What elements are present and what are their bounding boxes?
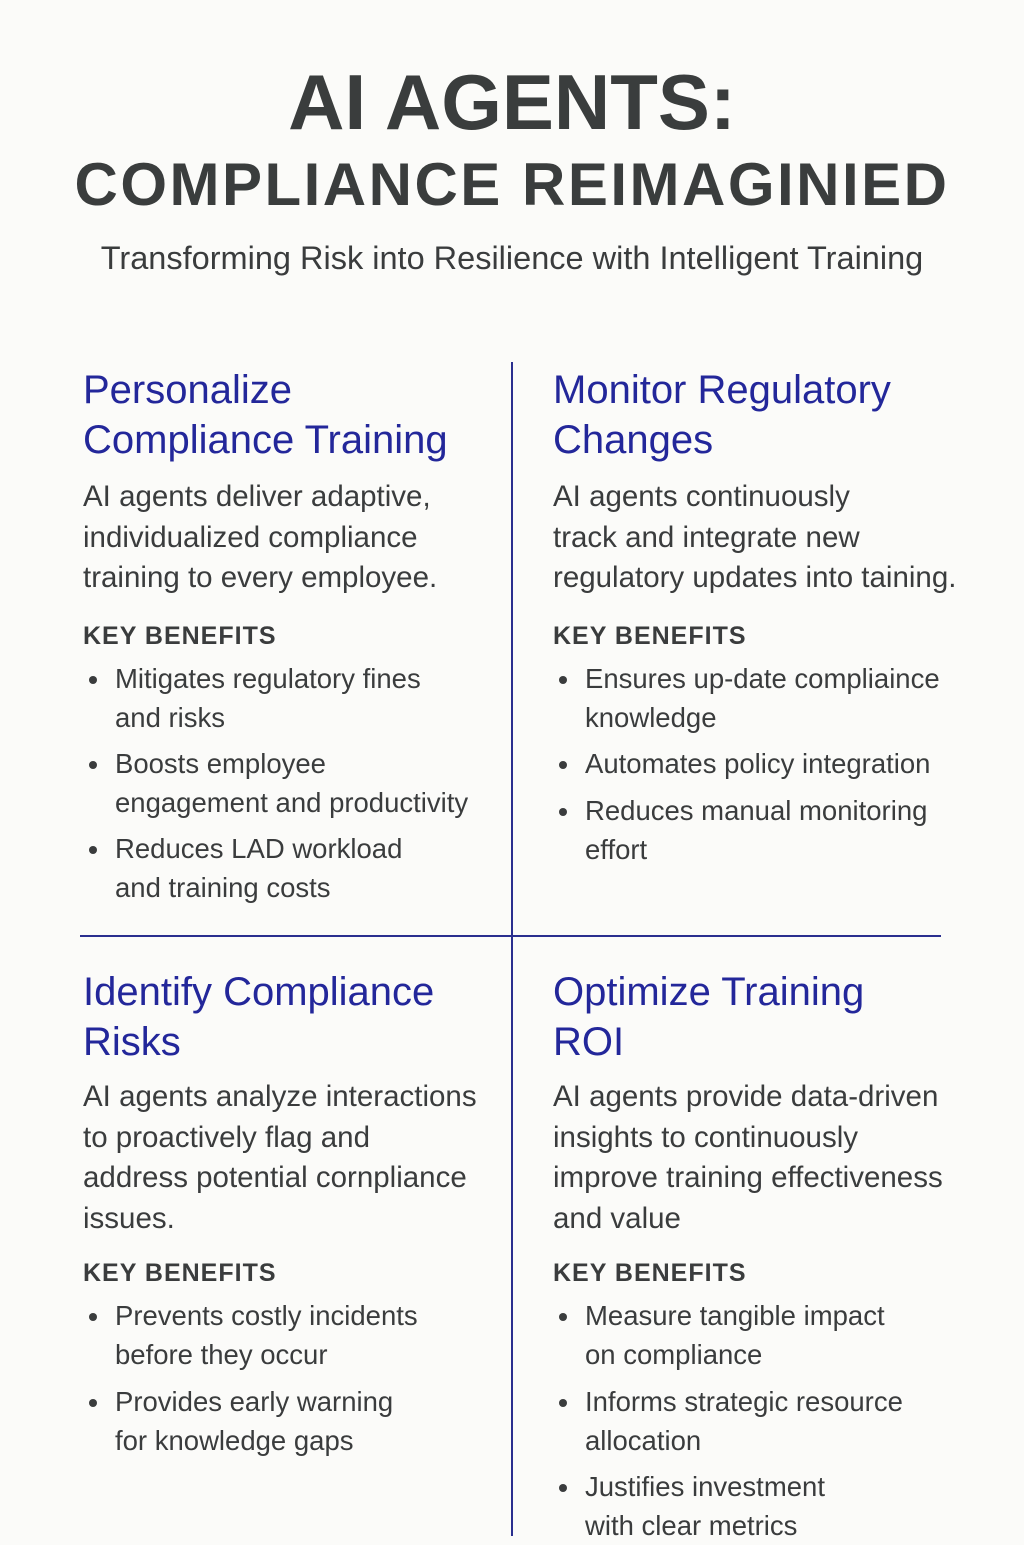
heading: ROI bbox=[553, 1020, 624, 1064]
description: AI agents deliver adaptive, bbox=[83, 480, 431, 513]
key benefits label: KEY BENEFITS bbox=[83, 1259, 277, 1287]
bullet list bbox=[89, 1300, 418, 1456]
description: regulatory updates into taining. bbox=[553, 561, 956, 594]
bullet list: Mitigates regulatory fines bbox=[115, 663, 421, 694]
heading: Identify Compliance bbox=[83, 970, 434, 1014]
heading bbox=[83, 368, 448, 462]
description: issues. bbox=[83, 1202, 175, 1234]
bullet list bbox=[559, 663, 940, 864]
bullet list: Automates policy integration bbox=[585, 748, 930, 779]
key benefits label: KEY BENEFITS bbox=[83, 622, 277, 650]
bullet list: allocation bbox=[585, 1424, 701, 1456]
heading bbox=[553, 970, 864, 1064]
panel: personalize bbox=[83, 368, 468, 903]
description: AI agents provide data-driven bbox=[553, 1080, 938, 1113]
description: address potential cornpliance bbox=[83, 1161, 467, 1194]
description bbox=[553, 480, 956, 594]
bullet list: engagement and productivity bbox=[115, 786, 468, 818]
bullet list: Informs strategic resource bbox=[585, 1386, 903, 1417]
description bbox=[83, 1080, 477, 1234]
bullet list: for knowledge gaps bbox=[115, 1424, 354, 1456]
description bbox=[83, 480, 437, 594]
description: improve training effectiveness bbox=[553, 1161, 943, 1194]
bullet list: Reduces manual monitoring bbox=[585, 795, 927, 826]
heading: Optimize Training bbox=[553, 970, 864, 1014]
bullet list: and risks bbox=[115, 702, 225, 732]
bullet list bbox=[559, 1300, 903, 1540]
tagline: Transforming Risk into Resilience with Intelligent Training bbox=[101, 240, 923, 276]
key benefits label: KEY BENEFITS bbox=[553, 1259, 747, 1287]
description: and value bbox=[553, 1202, 681, 1234]
bullet list: Justifies investment bbox=[585, 1471, 825, 1502]
bullet list: and training costs bbox=[115, 872, 331, 902]
description: to proactively flag and bbox=[83, 1120, 370, 1154]
bullet list: Measure tangible impact bbox=[585, 1300, 885, 1331]
bullet list: effort bbox=[585, 834, 647, 864]
heading: Personalize bbox=[83, 368, 292, 412]
description: track and integrate new bbox=[553, 520, 860, 554]
description: AI agents continuously bbox=[553, 480, 850, 513]
heading bbox=[83, 970, 434, 1064]
description: individualized compliance bbox=[83, 520, 418, 554]
description: AI agents analyze interactions bbox=[83, 1080, 477, 1113]
heading: Changes bbox=[553, 418, 713, 462]
bullet list: knowledge bbox=[585, 702, 716, 732]
description bbox=[553, 1080, 943, 1234]
description: training to every employee. bbox=[83, 561, 437, 594]
bullet list bbox=[89, 663, 468, 903]
heading bbox=[553, 368, 891, 462]
panel: identify bbox=[83, 970, 477, 1456]
bullet list: Ensures up-date compliaince bbox=[585, 663, 940, 694]
bullet list: Provides early warning bbox=[115, 1386, 393, 1417]
title: AI AGENTS: bbox=[288, 58, 736, 146]
key benefits label: KEY BENEFITS bbox=[553, 622, 747, 650]
bullet list: Boosts employee bbox=[115, 748, 326, 779]
bullet list: Prevents costly incidents bbox=[115, 1300, 418, 1331]
bullet list: on compliance bbox=[585, 1338, 762, 1370]
heading: Compliance Training bbox=[83, 418, 448, 462]
description: insights to continuously bbox=[553, 1120, 858, 1154]
heading: Monitor Regulatory bbox=[553, 368, 891, 412]
heading: Risks bbox=[83, 1020, 181, 1064]
bullet list: before they occur bbox=[115, 1338, 327, 1370]
subtitle heading: COMPLIANCE REIMAGINIED bbox=[74, 151, 950, 218]
panel: monitor bbox=[553, 368, 956, 864]
bullet list: with clear metrics bbox=[585, 1510, 797, 1540]
bullet list: Reduces LAD workload bbox=[115, 833, 402, 864]
panel: optimize bbox=[553, 970, 943, 1540]
